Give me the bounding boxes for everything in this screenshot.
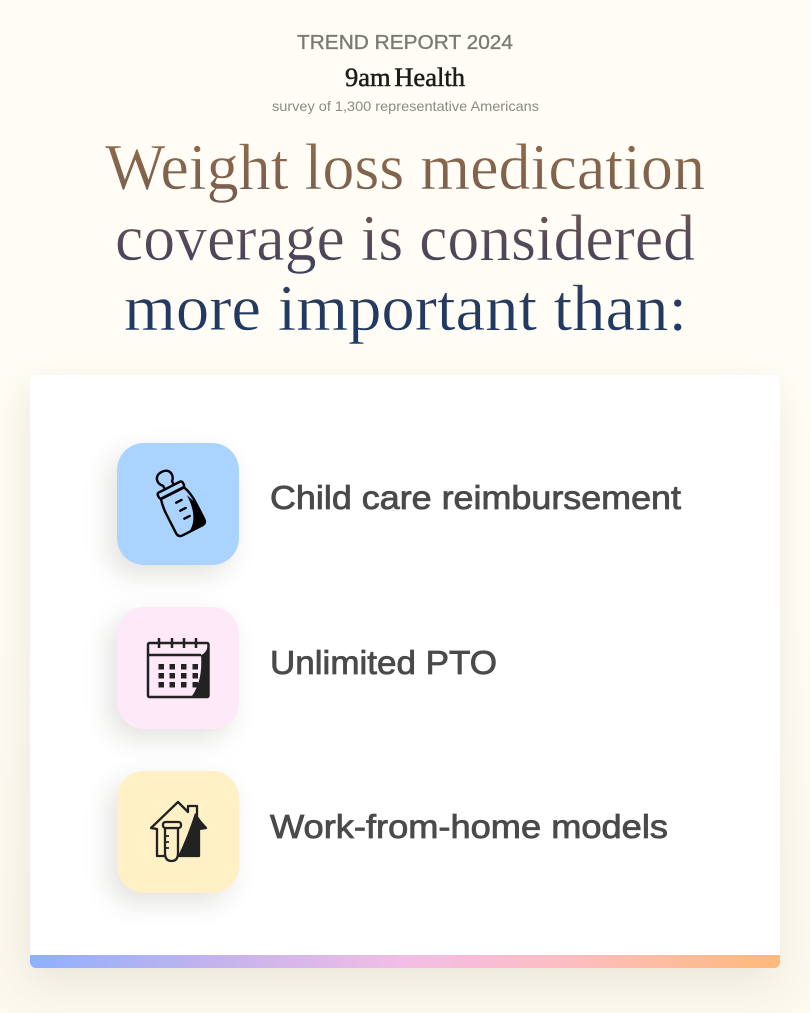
title: more important than: (124, 272, 687, 345)
icon: baby bottle (148, 464, 206, 538)
title: coverage is considered (115, 202, 695, 275)
icon tile: pink (117, 607, 239, 729)
title: Weight loss medication (105, 131, 705, 204)
logo: 9amHealth: 9am Health (345, 63, 465, 92)
survey note: survey of 1,300 representative Americans (272, 98, 539, 114)
label: child care: Child care reimbursement (270, 479, 681, 516)
label: unlimited PTO: Unlimited PTO (270, 644, 497, 681)
panel: white card (30, 375, 780, 968)
icon tile: blue (117, 443, 239, 565)
title (105, 131, 705, 345)
eyebrow: trend report: TREND REPORT 2024 (297, 32, 513, 54)
label: work from home: Work-from-home models (270, 808, 668, 845)
gradient bar at card bottom (30, 955, 780, 968)
icon: calendar (148, 638, 209, 697)
icon: house with test tube (151, 802, 206, 861)
icon tile: yellow (117, 771, 239, 893)
